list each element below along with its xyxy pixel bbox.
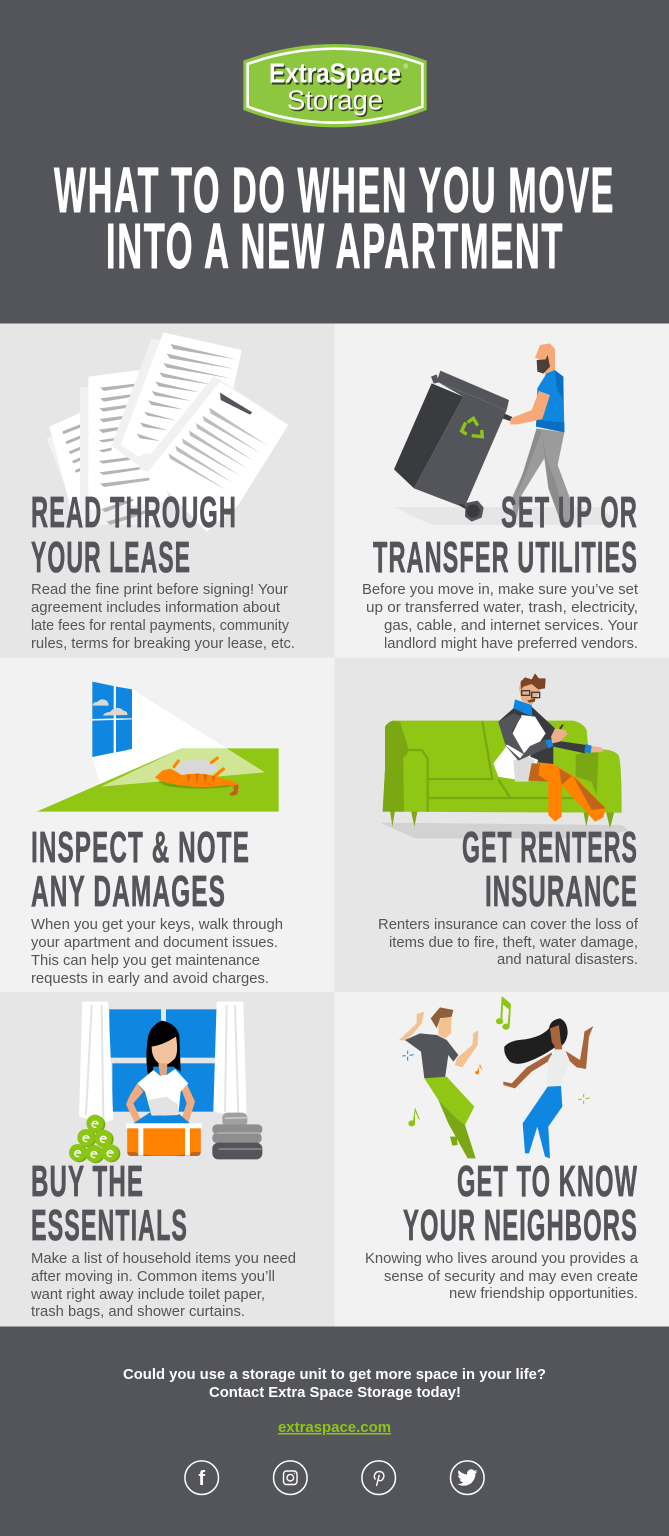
panel: buy the essentials — [0, 992, 334, 1326]
text block: neighbors: sense of security and may even create — [384, 1269, 638, 1285]
heading: read through your lease — [31, 488, 237, 582]
panel: get to know your neighbors — [334, 992, 669, 1326]
text block: neighbors: new friendship opportunities. — [449, 1286, 638, 1302]
illustration: man and dog on green sofa — [380, 673, 628, 838]
panel: get renters insurance — [334, 658, 669, 992]
icon: pinterest — [362, 1461, 396, 1494]
text block: insurance: items due to fire, theft, water damage, — [389, 935, 638, 951]
logo: Extra Space Storage: ExtraSpace — [269, 58, 401, 89]
text block: neighbors: Knowing who lives around you provides a — [365, 1251, 639, 1267]
logo: Extra Space Storage: ExtraSpace — [270, 59, 402, 90]
call to action text: Contact Extra Space Storage today! — [209, 1385, 461, 1401]
text block: lease: agreement includes information about — [31, 600, 280, 616]
logo: Extra Space Storage — [243, 44, 427, 127]
text block: lease: Read the fine print before signing! Your — [31, 582, 288, 598]
illustration: woman with box, towels and toilet paper — [69, 1002, 262, 1163]
heading: set up or transfer utilities — [373, 488, 638, 582]
title — [54, 154, 615, 282]
illustration: neighbors dancing — [399, 996, 593, 1158]
heading: buy the essentials: ESSENTIALS — [31, 1201, 188, 1250]
text block: lease — [31, 582, 295, 652]
logo: Extra Space Storage: Storage — [288, 86, 384, 117]
heading: inspect and note any damages: ANY DAMAGES — [31, 867, 226, 916]
logo: Extra Space Storage: Storage — [287, 84, 383, 115]
text block: damages — [31, 917, 283, 987]
text block: essentials: trash bags, and shower curtains. — [31, 1304, 245, 1320]
heading: buy the essentials: BUY THE — [31, 1157, 144, 1206]
heading: buy the essentials — [31, 1157, 188, 1250]
text block: essentials — [30, 1251, 296, 1320]
panel: set up or transfer utilities — [334, 324, 669, 658]
text block: utilities: landlord might have preferred vendors. — [384, 636, 638, 652]
text block: insurance: and natural disasters. — [497, 952, 638, 968]
text block: essentials: Make a list of household items you need — [31, 1251, 296, 1267]
text block: damages: This can help you get maintenance — [31, 953, 260, 969]
text block: neighbors — [365, 1251, 639, 1302]
heading: get renters insurance — [462, 823, 638, 916]
icon: facebook: f — [198, 1468, 205, 1490]
text block: damages: your apartment and document issues. — [31, 935, 278, 951]
text block: essentials: after moving in. Common items you’ll — [31, 1269, 275, 1285]
heading: inspect and note any damages: INSPECT & NOTE — [31, 823, 250, 872]
icon: instagram — [274, 1461, 307, 1494]
text block: insurance: Renters insurance can cover the loss of — [378, 917, 639, 933]
heading: read through your lease: READ THROUGH — [31, 488, 237, 537]
text block: damages: requests in early and avoid charges. — [31, 971, 269, 987]
icon: twitter — [450, 1461, 484, 1494]
text block: utilities: up or transferred water, trash, electricity, — [366, 600, 638, 616]
heading: get to know your neighbors — [403, 1157, 638, 1250]
website link: extraspace.com — [278, 1419, 391, 1436]
text block: utilities — [362, 582, 638, 652]
text block: lease: late fees for rental payments, community — [31, 618, 290, 634]
logo: Extra Space Storage: ® — [403, 64, 408, 71]
text block: insurance — [378, 917, 639, 968]
text block: utilities: gas, cable, and internet services. Your — [384, 618, 638, 634]
heading: inspect and note any damages — [31, 823, 250, 916]
call to action text: Could you use a storage unit to get more space in your life? — [123, 1367, 546, 1383]
illustration: man pushing recycling bin — [394, 343, 618, 525]
text block: lease: rules, terms for breaking your lease, etc. — [31, 636, 295, 652]
text block: essentials: want right away include toilet paper, — [30, 1287, 265, 1303]
panel: inspect and note any damages — [0, 658, 334, 992]
illustration: cat on floor by window — [37, 682, 279, 812]
text block: utilities: Before you move in, make sure you’ve set — [362, 582, 638, 598]
illustration: lease papers — [47, 332, 288, 532]
header panel — [0, 0, 669, 324]
heading: read through your lease: YOUR LEASE — [31, 533, 191, 582]
icon: recycling symbol — [462, 418, 482, 437]
panel: read through your lease — [0, 324, 334, 658]
text block: damages: When you get your keys, walk through — [31, 917, 283, 933]
call to action text — [123, 1367, 546, 1401]
footer panel — [0, 1326, 669, 1536]
icon: facebook — [185, 1461, 218, 1494]
